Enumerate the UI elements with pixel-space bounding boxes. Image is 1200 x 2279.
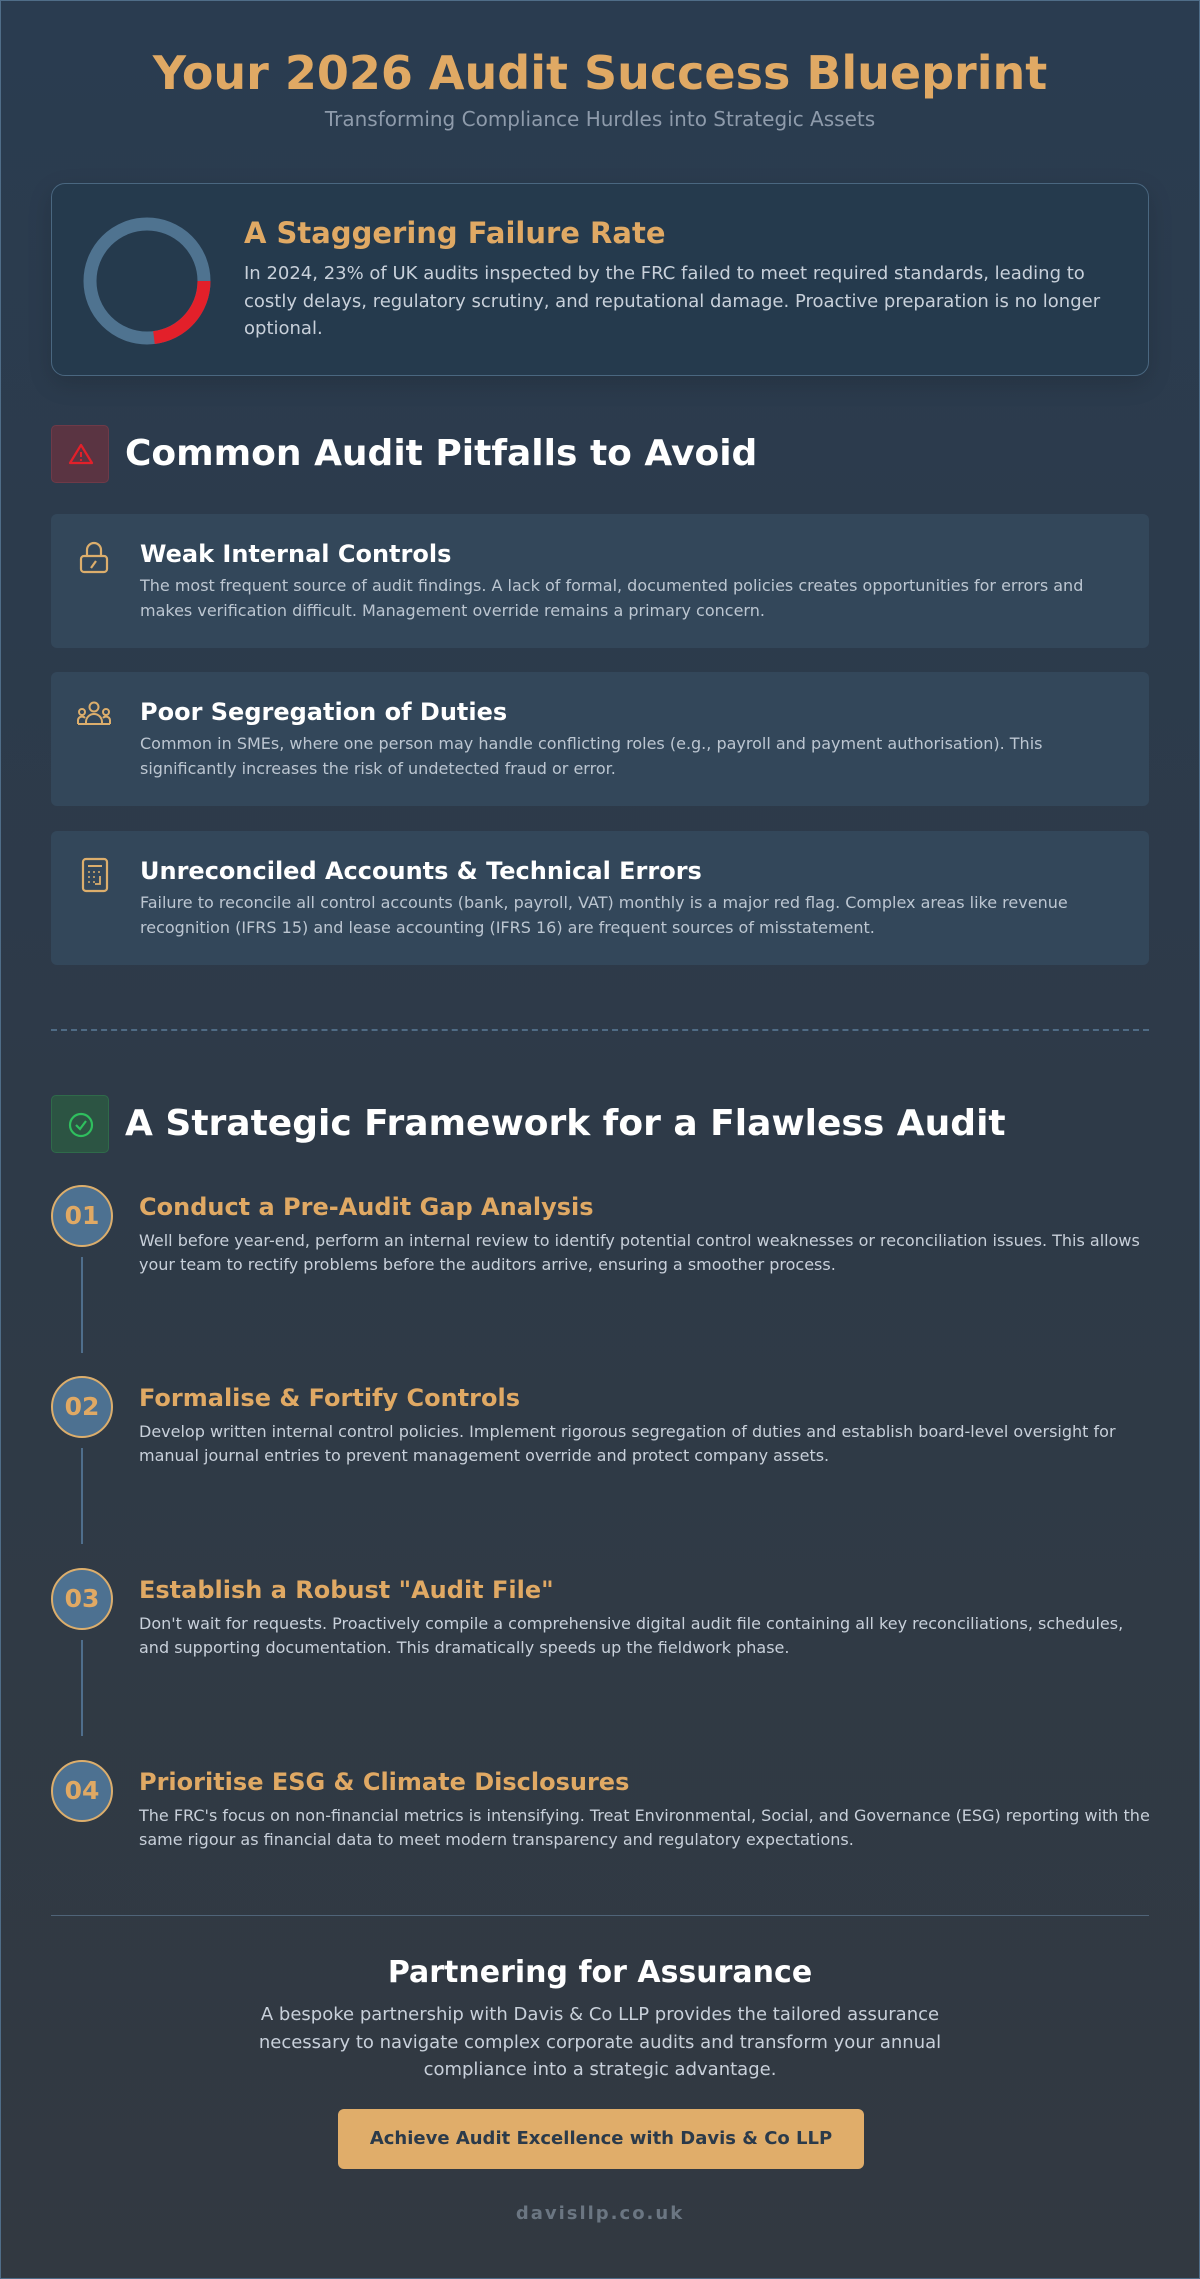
footer: davisllp.co.uk bbox=[516, 2203, 684, 2224]
card: segregation of duties: Poor Segregation of Duties bbox=[140, 698, 507, 726]
icon: check circle bbox=[51, 1095, 109, 1153]
closing text: A bespoke partnership with Davis & Co LLP provides the tailored assurance bbox=[261, 2004, 939, 2025]
card: weak internal controls: Weak Internal Controls bbox=[140, 540, 451, 568]
heading: framework: A Strategic Framework for a Flawless Audit bbox=[125, 1103, 1006, 1144]
icon: warning bbox=[51, 425, 109, 483]
closing text: compliance into a strategic advantage. bbox=[424, 2059, 776, 2080]
step 03 bbox=[51, 1568, 1123, 1736]
heading: pitfalls bbox=[51, 425, 757, 483]
step 03: Establish a Robust "Audit File" bbox=[139, 1576, 554, 1604]
heading: framework bbox=[51, 1095, 1006, 1153]
card: unreconciled accounts: Failure to reconcile all control accounts (bank, payroll, VAT) monthly is a major red flag. Complex areas like revenue recognition (IFRS 15) and lease accounting (IFRS 16) are frequent sources of misstatement. bbox=[140, 893, 1068, 936]
step 04: Prioritise ESG & Climate Disclosures bbox=[139, 1768, 629, 1796]
donut chart: 23% bbox=[84, 218, 210, 344]
closing heading: Partnering for Assurance bbox=[388, 1955, 812, 1990]
step 04: 04 bbox=[65, 1776, 99, 1805]
step 02: Develop written internal control policies. Implement rigorous segregation of duties and establish board-level oversight for manual journal entries to prevent management override and protect company assets. bbox=[139, 1422, 1116, 1464]
icon: calculator bbox=[82, 858, 108, 892]
card: unreconciled accounts bbox=[51, 831, 1149, 965]
step 01 bbox=[51, 1185, 1140, 1353]
step 02: Formalise & Fortify Controls bbox=[139, 1384, 520, 1412]
card: segregation of duties bbox=[51, 672, 1149, 806]
card: unreconciled accounts: Unreconciled Accounts & Technical Errors bbox=[140, 857, 702, 885]
step 03: Don't wait for requests. Proactively compile a comprehensive digital audit file containing all key reconciliations, schedules, and supporting documentation. This dramatically speeds up the fieldwork phase. bbox=[139, 1614, 1123, 1656]
stat heading: A Staggering Failure Rate bbox=[244, 216, 666, 250]
title: Your 2026 Audit Success Blueprint bbox=[153, 46, 1047, 100]
CTA button: Achieve Audit Excellence with Davis & Co LLP bbox=[370, 2128, 832, 2149]
heading: pitfalls: Common Audit Pitfalls to Avoid bbox=[125, 433, 757, 474]
card: weak internal controls bbox=[51, 514, 1149, 648]
icon: lock bbox=[80, 542, 108, 574]
card: segregation of duties: Common in SMEs, where one person may handle conflicting roles (e.g., payroll and payment authorisation). This significantly increases the risk of undetected fraud or error. bbox=[140, 734, 1042, 778]
step 01: Conduct a Pre-Audit Gap Analysis bbox=[139, 1193, 594, 1221]
panel: failure rate stat bbox=[51, 183, 1149, 376]
CTA button bbox=[338, 2109, 864, 2169]
step 02: 02 bbox=[65, 1392, 99, 1421]
stat text: In 2024, 23% of UK audits inspected by the FRC failed to meet required standards, leading to costly delays, regulatory scrutiny, and reputational damage. Proactive preparation is no longer optional. bbox=[244, 263, 1100, 339]
step 03: 03 bbox=[65, 1584, 99, 1613]
closing text: necessary to navigate complex corporate audits and transform your annual bbox=[259, 2032, 941, 2052]
step 04 bbox=[51, 1760, 1150, 1848]
closing text bbox=[259, 2004, 941, 2080]
subtitle: Transforming Compliance Hurdles into Strategic Assets bbox=[325, 107, 875, 131]
step 01: 01 bbox=[65, 1201, 99, 1230]
step 02 bbox=[51, 1376, 1116, 1544]
step 01: Well before year-end, perform an internal review to identify potential control weaknesses or reconciliation issues. This allows your team to rectify problems before the auditors arrive, ensuring a smoother process. bbox=[139, 1231, 1140, 1274]
icon: people bbox=[77, 702, 111, 725]
card: weak internal controls: The most frequent source of audit findings. A lack of formal, documented policies creates opportunities for errors and makes verification difficult. Management override remains a primary concern. bbox=[140, 576, 1083, 620]
step 04: The FRC's focus on non-financial metrics is intensifying. Treat Environmental, Social, and Governance (ESG) reporting with the same rigour as financial data to meet modern transparency and regulatory expectations. bbox=[139, 1806, 1150, 1848]
